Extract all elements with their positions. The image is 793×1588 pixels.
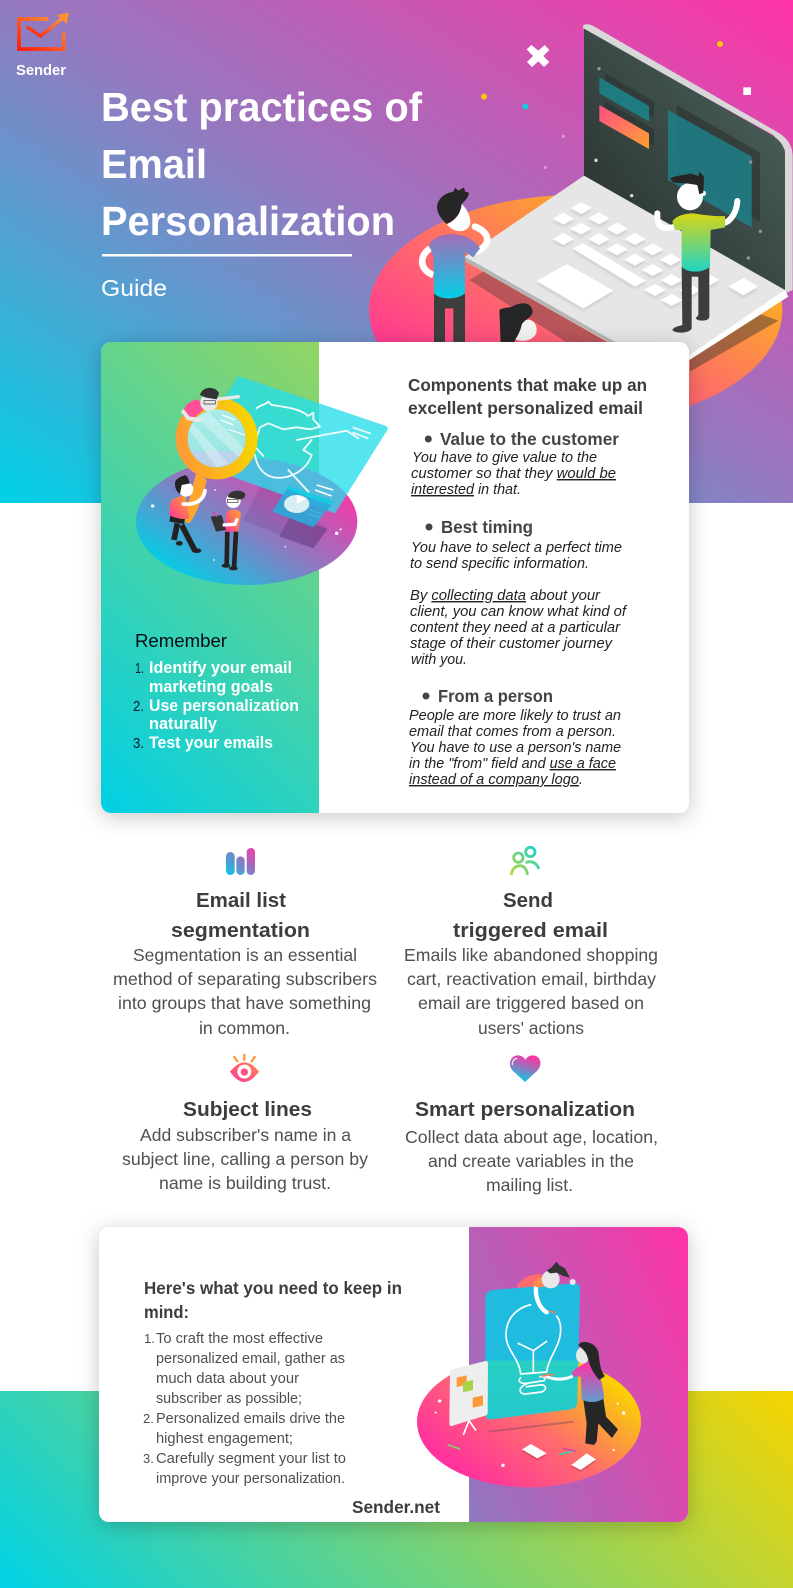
title: Personalization: [101, 198, 395, 244]
panel: gradient left side: [101, 342, 319, 813]
title: [101, 84, 422, 244]
text: best timing: stage of their customer journey: [410, 636, 613, 652]
text: keep in mind list: 3.: [143, 1451, 154, 1466]
block: send triggered email: email are triggered based on: [418, 993, 644, 1013]
illustration: magnifying glass with team: [136, 376, 388, 585]
text: best timing: [410, 517, 628, 668]
heading: keep in mind: mind:: [144, 1302, 189, 1322]
title underline: [102, 254, 352, 256]
text: Remember list: Identify your email: [149, 659, 292, 677]
panel: components card: [101, 342, 689, 813]
block: send triggered email: triggered email: [453, 919, 608, 942]
text: Remember list: Remember: [135, 631, 227, 651]
text: keep in mind list: Personalized emails drive the: [156, 1410, 345, 1427]
text: from a person: You have to use a person's name: [410, 740, 621, 756]
laptop base and keys: [465, 176, 788, 375]
block: email list segmentation: Email list: [196, 889, 286, 912]
illustration: laptop with people: [369, 24, 793, 425]
block: subject lines: name is building trust.: [159, 1173, 331, 1193]
illustration: light bulb with people: [417, 1262, 641, 1487]
block: smart personalization: Smart personalization: [415, 1098, 635, 1121]
laptop screen: [583, 24, 793, 293]
icon: eye: [230, 1055, 259, 1082]
icon: bar chart: [226, 848, 255, 875]
text: best timing: content they need at a particular: [410, 620, 621, 636]
panel: gradient right side: [469, 1227, 688, 1522]
block: subject lines: Add subscriber's name in a: [140, 1125, 351, 1145]
text: from a person: People are more likely to trust an: [409, 708, 621, 724]
title: Best practices of: [101, 84, 422, 130]
text: keep in mind list: To craft the most effective: [156, 1330, 323, 1347]
text: keep in mind list: 1.: [144, 1331, 155, 1346]
text: keep in mind list: Carefully segment your list to: [156, 1450, 346, 1467]
text: value to the customer: [411, 429, 619, 498]
text: from a person: From a person: [438, 686, 553, 706]
whiteboard: [449, 1361, 488, 1435]
block: email list segmentation: segmentation: [171, 919, 310, 942]
text: from a person: [409, 686, 621, 788]
text: value to the customer: You have to give value to the: [412, 450, 597, 466]
text: best timing: By collecting data about your: [410, 588, 601, 604]
text: from a person: email that comes from a person.: [409, 724, 616, 740]
person on top of card: [533, 1262, 576, 1313]
heading: keep in mind: [144, 1278, 402, 1322]
subtitle: Guide: [101, 275, 167, 301]
block: email list segmentation: [113, 889, 377, 1038]
text: value to the customer: Value to the customer: [440, 429, 619, 449]
block: subject lines: Subject lines: [183, 1098, 312, 1121]
person with clipboard: [211, 491, 245, 570]
logo: Sender: Sender: [16, 62, 66, 79]
header gradient background: [0, 0, 793, 503]
text: Remember list: 3.: [133, 735, 144, 752]
text: Remember list: naturally: [149, 715, 218, 733]
text: Remember list: 1.: [135, 660, 144, 677]
text: best timing: client, you can know what kind of: [410, 604, 628, 620]
person on top of magnifier: [183, 388, 238, 420]
block: send triggered email: Emails like abandoned shopping: [404, 945, 658, 965]
person holding magnifier: [169, 475, 205, 553]
text: value to the customer: interested in that.: [411, 482, 521, 498]
text: Remember list: [133, 631, 299, 752]
text: value to the customer: customer so that they would be: [411, 466, 616, 482]
text: keep in mind list: personalized email, gather as: [156, 1350, 345, 1367]
icon: heart: [510, 1055, 540, 1082]
block: send triggered email: cart, reactivation email, birthday: [407, 969, 656, 989]
icon: envelope with arrow: [19, 13, 69, 49]
block: email list segmentation: method of separating subscribers: [113, 969, 377, 989]
block: smart personalization: and create variables in the: [428, 1151, 634, 1171]
block: email list segmentation: Segmentation is an essential: [133, 945, 357, 965]
heading: components: excellent personalized email: [408, 398, 643, 418]
text: best timing: You have to select a perfect time: [411, 540, 622, 556]
text: from a person: in the "from" field and use a face: [409, 756, 616, 772]
text: keep in mind list: improve your personalization.: [156, 1470, 345, 1487]
block: smart personalization: [405, 1098, 658, 1195]
decorative confetti: [481, 41, 751, 169]
text: best timing: to send specific information.: [410, 556, 589, 572]
person: woman: [542, 1342, 618, 1445]
text: best timing: Best timing: [441, 517, 533, 537]
text: best timing: with you.: [411, 652, 467, 668]
person: man at left: [422, 187, 487, 343]
bottom gradient band: [0, 1391, 793, 1588]
text: from a person: instead of a company logo.: [409, 772, 583, 788]
block: subject lines: subject line, calling a person by: [122, 1149, 368, 1169]
text: Remember list: marketing goals: [149, 678, 273, 696]
text: keep in mind list: highest engagement;: [156, 1430, 293, 1447]
text: keep in mind list: much data about your: [156, 1370, 299, 1387]
text: keep in mind list: subscriber as possible;: [156, 1390, 302, 1407]
block: send triggered email: Send: [503, 889, 553, 912]
heading: keep in mind: Here's what you need to keep in: [144, 1278, 402, 1298]
heading: components: [408, 375, 647, 418]
heading: components: Components that make up an: [408, 375, 647, 395]
block: subject lines: [122, 1098, 368, 1193]
text: keep in mind list: 2.: [143, 1411, 154, 1426]
icon: people: [511, 847, 539, 875]
person: man on keyboard: [657, 172, 737, 333]
panel: keep in mind card: [99, 1227, 688, 1522]
block: smart personalization: Collect data about age, location,: [405, 1127, 658, 1147]
text: Remember list: 2.: [133, 698, 144, 715]
block: email list segmentation: into groups that have something: [118, 993, 371, 1013]
person: woman behind card: [499, 303, 537, 343]
logo: Sender: [16, 13, 69, 79]
title: Email: [101, 141, 207, 187]
block: email list segmentation: in common.: [199, 1018, 290, 1038]
footer: Sender.net: Sender.net: [352, 1497, 440, 1517]
text: Remember list: Test your emails: [149, 734, 273, 752]
block: smart personalization: mailing list.: [486, 1175, 573, 1195]
block: send triggered email: [404, 889, 658, 1038]
block: send triggered email: users' actions: [478, 1018, 584, 1038]
text: Remember list: Use personalization: [149, 697, 299, 715]
text: keep in mind list: [143, 1330, 346, 1487]
